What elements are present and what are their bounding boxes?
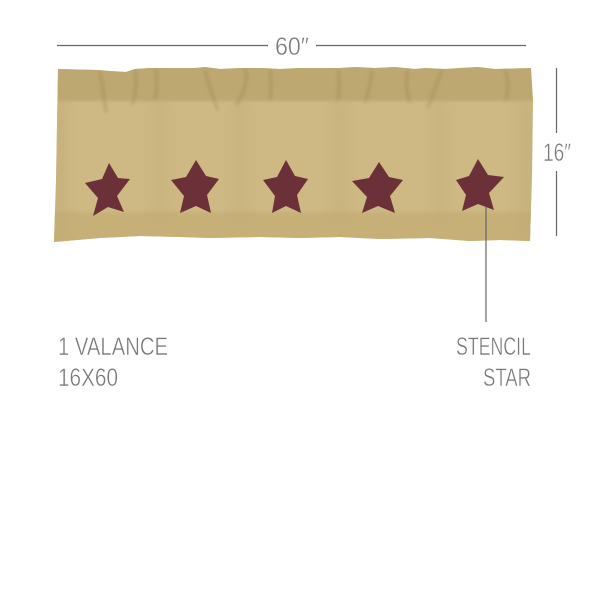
stencil star label <box>456 333 531 392</box>
product quantity text <box>58 333 168 392</box>
width dimension line <box>57 44 526 46</box>
product quantity text: 1 VALANCE <box>58 333 168 361</box>
star 3 <box>263 160 308 213</box>
curtain: tan valance fabric <box>50 60 540 250</box>
width label: 60″ <box>275 33 309 61</box>
star 1 <box>85 163 130 216</box>
product quantity text: 16X60 <box>58 364 118 392</box>
height dimension line <box>556 68 558 236</box>
stencil star label: STENCIL <box>456 333 531 361</box>
height label: 16″ <box>543 139 571 167</box>
star 5 <box>456 159 504 211</box>
leader line to star <box>485 207 487 322</box>
infographic: valance product diagram <box>54 38 571 386</box>
star 2 <box>171 160 219 213</box>
stencil star label: STAR <box>483 364 531 392</box>
star 4 <box>352 162 403 213</box>
